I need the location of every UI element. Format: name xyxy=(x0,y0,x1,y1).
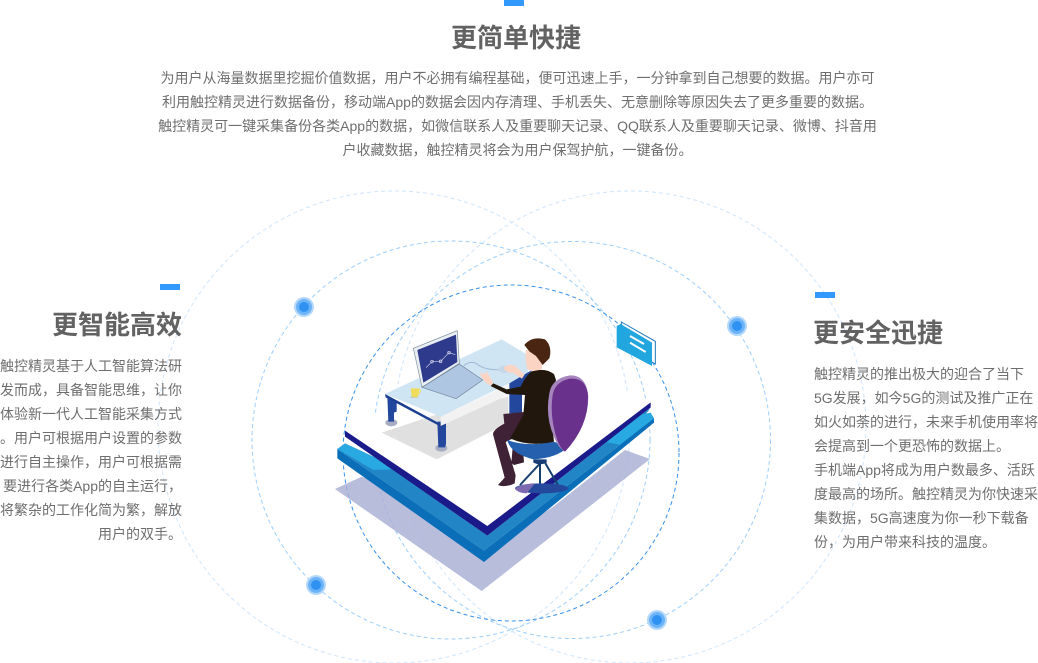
right text block: 会提高到一个更恐怖的数据上。 xyxy=(814,438,1010,454)
left text block: 触控精灵基于人工智能算法研 xyxy=(0,358,182,374)
node dots xyxy=(294,297,747,630)
top accent bar xyxy=(504,0,524,6)
left text block: 。用户可根据用户设置的参数 xyxy=(0,430,182,446)
left text block: 进行自主操作，用户可根据需 xyxy=(0,454,182,470)
heading: 更安全迅捷: 更安全迅捷 xyxy=(813,318,943,348)
heading: 更智能高效: 更智能高效 xyxy=(52,310,182,340)
person on chair xyxy=(480,338,588,493)
cup xyxy=(410,388,420,398)
right text block: 份，为用户带来科技的温度。 xyxy=(814,534,996,550)
left text block xyxy=(0,358,182,542)
left text block: 将繁杂的工作化简为繁，解放 xyxy=(0,502,182,518)
face and hair xyxy=(526,349,542,371)
right text block xyxy=(814,366,1038,550)
laptop xyxy=(413,331,513,399)
top text block: 利用触控精灵进行数据备份，移动端App的数据会因内存清理、手机丢失、无意删除等原因失去了更多重要的数据。 xyxy=(162,94,873,110)
left accent bar xyxy=(160,284,180,290)
hands xyxy=(480,371,493,385)
platform shadow xyxy=(335,450,650,591)
illustration: person working at desk on isometric platform xyxy=(335,321,656,591)
chair back xyxy=(548,375,588,452)
left text block: 用户的双手。 xyxy=(98,526,182,542)
right text block: 度最高的场所。触控精灵为你快速采 xyxy=(814,486,1038,502)
jacket xyxy=(491,370,556,444)
heading: 更简单快捷: 更简单快捷 xyxy=(451,23,581,53)
right accent bar xyxy=(815,292,835,298)
top text block: 户收藏数据，触控精灵将会为用户保驾护航，一键备份。 xyxy=(342,142,692,158)
right text block: 触控精灵的推出极大的迎合了当下 xyxy=(814,366,1024,382)
chair base xyxy=(520,462,559,487)
right text block: 5G发展，如今5G的测试及推广正在 xyxy=(814,390,1033,406)
right text block: 如火如荼的进行，未来手机使用率将 xyxy=(814,414,1038,430)
top text block: 为用户从海量数据里挖掘价值数据，用户不必拥有编程基础，便可迅速上手，一分钟拿到自己想要的数据。用户亦可 xyxy=(160,70,874,86)
left text block: 发而成，具备智能思维，让你 xyxy=(0,382,182,398)
left text block: 体验新一代人工智能采集方式 xyxy=(0,406,182,422)
desk shadow xyxy=(382,397,508,459)
platform edge xyxy=(337,402,654,562)
floating message card xyxy=(617,322,655,366)
trousers xyxy=(511,446,524,465)
white floor xyxy=(345,310,651,526)
top text block xyxy=(158,70,877,158)
right text block: 手机端App将成为用户数最多、活跃 xyxy=(814,462,1035,478)
seat xyxy=(507,440,568,459)
top text block: 触控精灵可一键采集备份各类App的数据，如微信联系人及重要聊天记录、QQ联系人及重要聊天记录、微博、抖音用 xyxy=(158,118,877,134)
desk xyxy=(385,339,533,452)
right text block: 集数据，5G高速度为你一秒下载备 xyxy=(814,510,1029,526)
left text block: 要进行各类App的自主运行， xyxy=(3,478,182,494)
